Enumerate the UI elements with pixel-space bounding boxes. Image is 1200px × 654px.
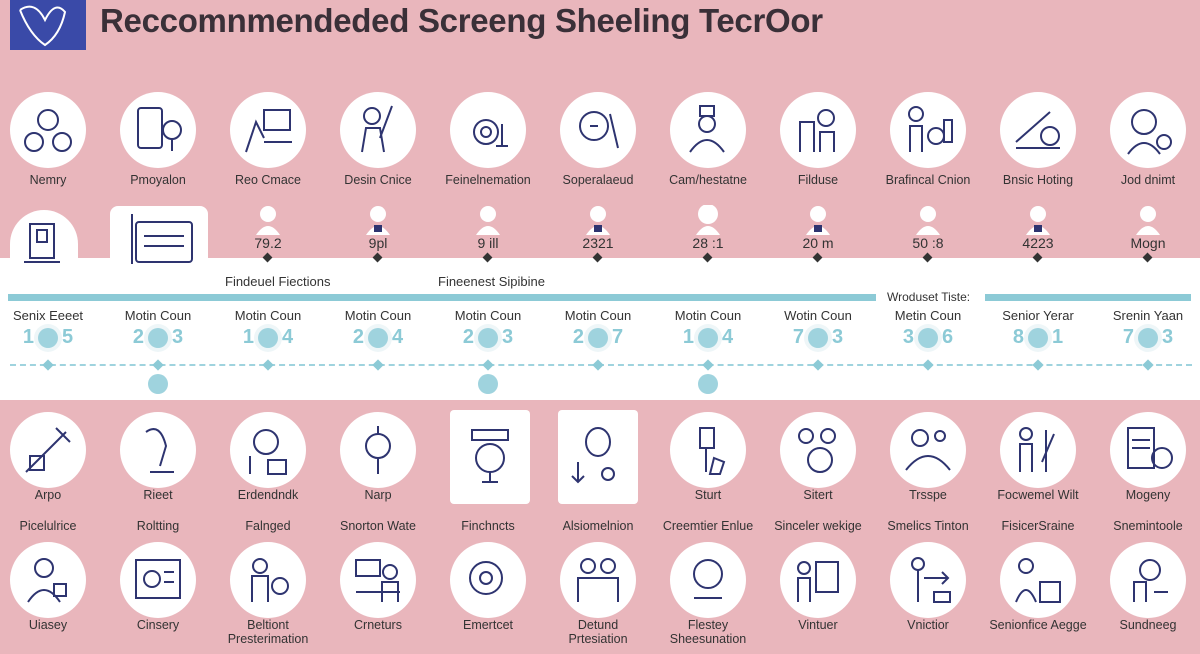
metrics row: 8 1 — [1013, 326, 1063, 348]
text: Fineenest Sipibine — [438, 274, 545, 289]
row 1 labels: Reo Cmace — [235, 173, 301, 187]
row 4 labels: Beltiont — [247, 618, 289, 632]
row 3 labels: Rieet — [143, 488, 173, 502]
row 3 labels: Trsspe — [909, 488, 947, 502]
row 3 labels: Alsiomelnion — [563, 519, 633, 533]
row 4 labels: Vnictior — [907, 618, 949, 632]
row 3 labels: FisicerSraine — [1002, 519, 1074, 533]
row 4 labels: Vintuer — [798, 618, 838, 632]
metrics row: Motin Coun — [565, 308, 631, 323]
row 1 labels: Soperalaeud — [563, 173, 633, 187]
stats row — [254, 205, 1166, 262]
row 3 labels: Focwemel Wilt — [997, 488, 1079, 502]
metrics row: 2 7 — [573, 326, 623, 348]
row 1 labels: Cam/hestatne — [669, 173, 747, 187]
metrics row: 1 4 — [243, 326, 293, 348]
metrics row: 1 4 — [683, 326, 733, 348]
metrics row: 3 6 — [903, 326, 953, 348]
row 1 labels: Pmoyalon — [130, 173, 186, 187]
row 4 labels: Uiasey — [29, 618, 67, 632]
row 3 labels — [20, 488, 1183, 533]
row 4 labels: Senionfice Aegge — [989, 618, 1087, 632]
row 3 labels: Narp — [364, 488, 392, 502]
row 3 labels: Smelics Tinton — [887, 519, 969, 533]
row 1 labels: Bnsic Hoting — [1003, 173, 1073, 187]
row 1 labels: Jod dnimt — [1121, 173, 1175, 187]
row 3 labels: Erdendndk — [238, 488, 298, 502]
row 1 labels: Filduse — [798, 173, 838, 187]
row 3 labels: Snemintoole — [1113, 519, 1183, 533]
row 3 icons — [10, 410, 1186, 504]
row 4 labels: Crneturs — [354, 618, 402, 632]
metrics row: Motin Coun — [235, 308, 301, 323]
stats row: 9pl — [369, 235, 387, 251]
tab: calendar — [10, 210, 78, 270]
row 1 labels: Desin Cnice — [344, 173, 412, 187]
row 4 labels: Cinsery — [137, 618, 179, 632]
row 4 icons — [10, 542, 1186, 618]
row 3 labels: Creemtier Enlue — [663, 519, 753, 533]
metrics row: 7 3 — [793, 326, 843, 348]
row 3 labels: Snorton Wate — [340, 519, 416, 533]
row 4 labels: Sundneeg — [1119, 618, 1176, 632]
row 4 labels: Emertcet — [463, 618, 513, 632]
row 4 labels: Detund — [578, 618, 618, 632]
metrics row: 7 3 — [1123, 326, 1173, 348]
metrics row: Metin Coun — [895, 308, 961, 323]
teal bar — [8, 294, 876, 301]
stats row: 4223 — [1022, 235, 1054, 251]
row 4 labels: Presterimation — [228, 632, 308, 646]
row 3 labels: Mogeny — [1126, 488, 1170, 502]
row 3 labels: Arpo — [35, 488, 61, 502]
metrics row: Motin Coun — [125, 308, 191, 323]
white band — [0, 258, 1200, 400]
logo — [10, 0, 86, 50]
stats row: 50 :8 — [912, 235, 944, 251]
stats row: 9 ill — [477, 235, 498, 251]
stats row: Mogn — [1130, 235, 1166, 251]
row 4 labels: Flestey — [688, 618, 728, 632]
metrics row: Senior Yerar — [1002, 308, 1074, 323]
row 4 labels: Sheesunation — [670, 632, 746, 646]
row 3 labels: Roltting — [137, 519, 179, 533]
metrics row: Senix Eeeet — [13, 308, 83, 323]
stats row: 20 m — [802, 235, 834, 251]
title: Reccomnmendeded Screeng Sheeling TecrOor — [100, 2, 823, 39]
metrics row: 1 5 — [23, 326, 73, 348]
metrics row: Srenin Yaan — [1113, 308, 1183, 323]
stats row: 28 :1 — [692, 235, 724, 251]
row 4 labels — [29, 618, 1176, 646]
metrics row: 2 3 — [463, 326, 513, 348]
row 3 labels: Finchncts — [461, 519, 515, 533]
row 3 labels: Sitert — [803, 488, 833, 502]
row 1 icons — [10, 92, 1186, 168]
metrics row — [10, 308, 1192, 394]
tab: keypad — [110, 206, 208, 276]
metrics row: 2 3 — [133, 326, 183, 348]
row 1 labels — [30, 173, 1175, 187]
row 3 labels: Sinceler wekige — [774, 519, 862, 533]
row 1 labels: Feinelnemation — [445, 173, 531, 187]
row 3 labels: Picelulrice — [20, 519, 76, 533]
metrics row: Motin Coun — [675, 308, 741, 323]
row 4 labels: Prtesiation — [568, 632, 628, 646]
metrics row: Wotin Coun — [784, 308, 852, 323]
row 3 labels: Sturt — [695, 488, 721, 502]
text: Wroduset Tiste: — [887, 290, 970, 304]
metrics row: Motin Coun — [455, 308, 521, 323]
row 1 labels: Brafincal Cnion — [886, 173, 970, 187]
metrics row: 2 4 — [353, 326, 403, 348]
stats row: 79.2 — [254, 235, 282, 251]
section headings: Findeuel Fiections — [225, 274, 330, 289]
row 1 labels: Nemry — [30, 173, 66, 187]
row 3 labels: Falnged — [245, 519, 291, 533]
stats row: 2321 — [582, 235, 614, 251]
metrics row: Motin Coun — [345, 308, 411, 323]
